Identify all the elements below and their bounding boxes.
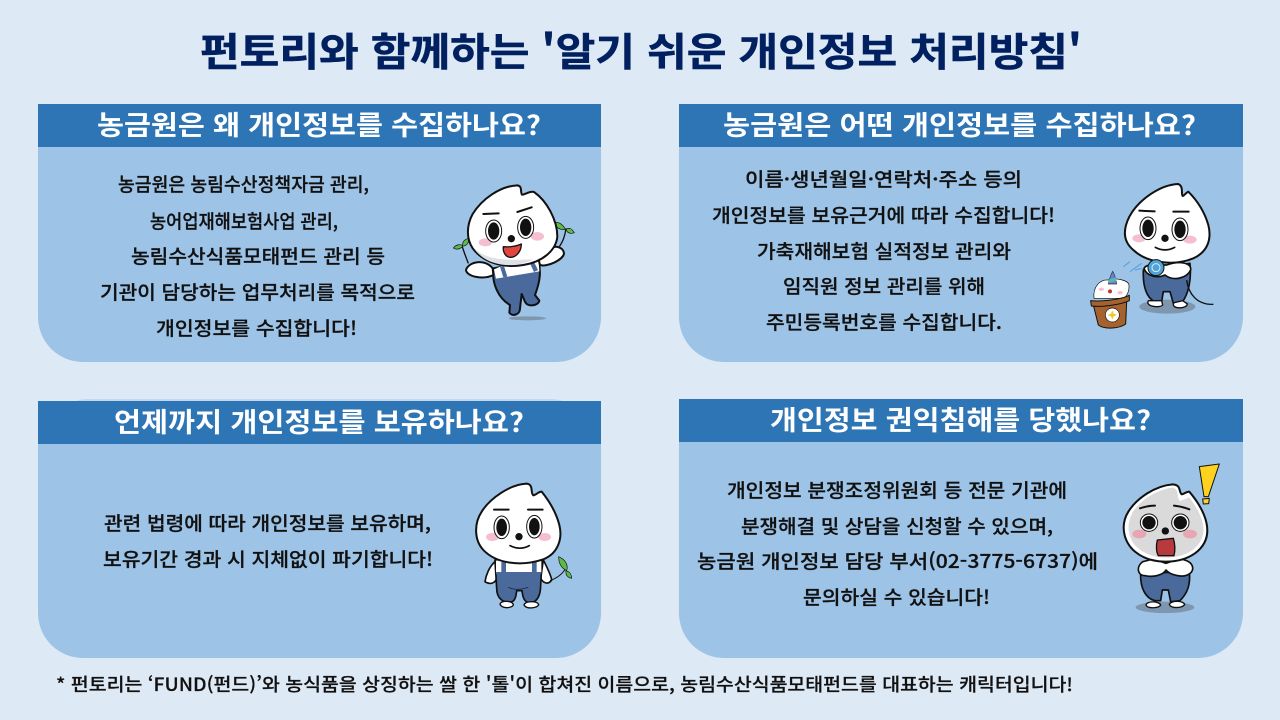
panel background <box>679 399 1243 658</box>
panel header bar <box>38 104 601 147</box>
title: 펀토리와 함께하는 '알기 쉬운 개인정보 처리방침' <box>200 22 1082 78</box>
body text <box>103 509 433 572</box>
body text: 개인정보를 수집합니다! <box>156 314 357 341</box>
body text: 농금원은 농림수산정책자금 관리, <box>118 170 369 197</box>
body text <box>697 476 1098 610</box>
body text: 주민등록번호를 수집합니다. <box>766 308 1002 335</box>
body text: 개인정보를 보유근거에 따라 수집합니다! <box>712 201 1055 228</box>
panel: what is collected <box>679 104 1243 362</box>
body text: 보유기간 경과 시 지체없이 파기합니다! <box>103 545 433 572</box>
panel header bar <box>679 399 1243 442</box>
body text: 임직원 정보 관리를 위해 <box>783 272 985 299</box>
body text: 농어업재해보험사업 관리, <box>150 207 338 234</box>
panel header bar <box>38 401 601 444</box>
body text: 농금원 개인정보 담당 부서(02-3775-6737)에 <box>697 547 1098 574</box>
panel background <box>38 104 601 362</box>
panel background <box>679 104 1243 362</box>
faint panel top edge <box>76 399 563 401</box>
panel header bar <box>679 104 1243 147</box>
panel background <box>38 444 601 658</box>
panel heading: 언제까지 개인정보를 보유하나요? <box>114 401 524 440</box>
panel heading: 농금원은 왜 개인정보를 수집하나요? <box>97 104 541 143</box>
icon: character holding a fan beside a potted plant <box>1091 184 1213 328</box>
icon: jumping character with sprouts <box>453 185 574 320</box>
body text: 개인정보 분쟁조정위원회 등 전문 기관에 <box>727 476 1067 503</box>
footnote: * 펀토리는 ‘FUND(펀드)’와 농식품을 상징하는 쌀 한 '톨'이 합쳐진 이름으로, 농림수산식품모태펀드를 대표하는 캐릭터입니다! <box>56 671 1073 697</box>
icon: surprised character with exclamation mark <box>1124 464 1219 613</box>
body text: 기관이 담당하는 업무처리를 목적으로 <box>100 278 415 305</box>
panel: rights infringement <box>679 399 1243 658</box>
panel heading: 개인정보 권익침해를 당했나요? <box>770 399 1151 438</box>
body text: 농림수산식품모태펀드 관리 등 <box>131 242 385 269</box>
panel heading: 농금원은 어떤 개인정보를 수집하나요? <box>723 104 1196 143</box>
body text: 분쟁해결 및 상담을 신청할 수 있으며, <box>741 512 1053 539</box>
body text: 가축재해보험 실적정보 관리와 <box>757 237 1011 264</box>
body text: 관련 법령에 따라 개인정보를 보유하며, <box>104 509 431 536</box>
body text: 이름·생년월일·연락처·주소 등의 <box>745 165 1022 192</box>
panel: retention period <box>38 399 601 658</box>
body text: 문의하실 수 있습니다! <box>803 583 990 610</box>
body text <box>100 170 415 341</box>
icon: standing character with sprout <box>476 484 572 608</box>
body text <box>712 165 1055 335</box>
panel: why collect <box>38 104 601 362</box>
